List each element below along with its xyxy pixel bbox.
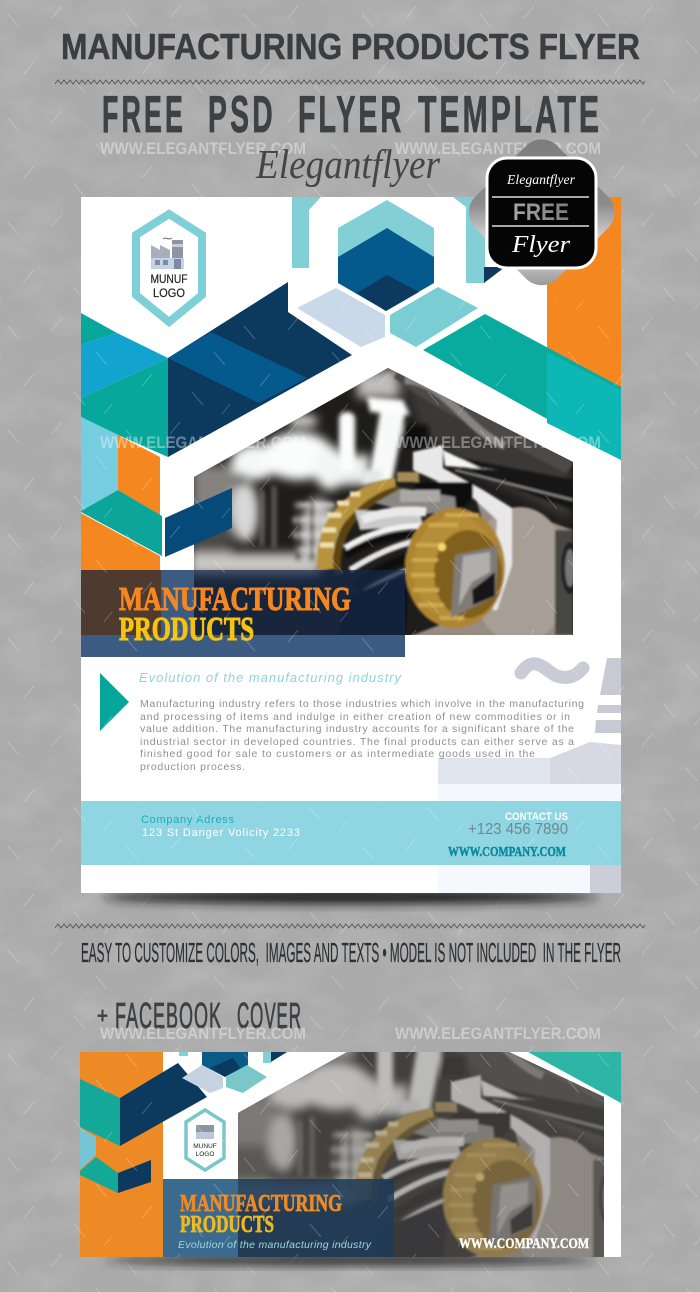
- cover headline: PRODUCTS: [180, 1212, 274, 1238]
- orange facet: [118, 435, 160, 515]
- navy hex block: [168, 282, 352, 457]
- logo hexagon: [136, 214, 202, 322]
- title band: [81, 570, 405, 657]
- teal right band: [423, 314, 621, 460]
- cover teal corner: [528, 1052, 621, 1103]
- cover navy facet lower: [118, 1160, 151, 1193]
- subtitle: FLYER: [298, 86, 404, 144]
- facebook cover heading: +: [97, 1003, 108, 1028]
- contact details: [448, 811, 568, 860]
- script logo: Elegantflyer: [255, 141, 441, 187]
- cover url: WWW.COMPANY.COM: [459, 1236, 589, 1252]
- cover headline: MANUFACTURING: [180, 1191, 342, 1217]
- contact details: WWW.COMPANY.COM: [448, 845, 566, 860]
- badge free: FREE: [513, 199, 569, 226]
- contact details: +123 456 7890: [468, 821, 568, 838]
- watermark row middle: [100, 433, 601, 452]
- free flyer badge: [460, 130, 624, 294]
- top hexagon: [338, 200, 434, 311]
- badge script top: Elegantflyer: [506, 173, 576, 188]
- flyer headline: MANUFACTURING: [119, 581, 351, 618]
- flyer headline: [119, 581, 351, 648]
- cover logo: MUNUF: [193, 1143, 217, 1150]
- navy chevron over photo: [165, 488, 232, 557]
- flyer shadow: [102, 890, 598, 904]
- flyer panel: [81, 197, 621, 893]
- hatch marks over flyer: [81, 300, 621, 893]
- logo text: LOGO: [153, 286, 185, 300]
- body copy: [140, 698, 584, 773]
- body copy: finished good for sale to customers or as intermediate goods used in the: [140, 748, 535, 760]
- logo text: MUNUF: [150, 272, 188, 286]
- cover logo: LOGO: [196, 1151, 214, 1158]
- cover teal facet lower: [80, 1157, 118, 1193]
- cover teal facet upper: [80, 1079, 120, 1146]
- watermark row bottom: WWW.ELEGANTFLYER.COM: [100, 1024, 306, 1043]
- watermark row top: WWW.ELEGANTFLYER.COM: [395, 139, 601, 158]
- cover top hex: [202, 1052, 248, 1077]
- address: Company Adress: [141, 814, 234, 826]
- subtitle: FREE: [102, 86, 186, 144]
- cover tagline: Evolution of the manufacturing industry: [178, 1239, 372, 1251]
- icon: factory: [151, 238, 184, 269]
- body copy: production process.: [140, 761, 245, 773]
- contact details: CONTACT US: [505, 811, 568, 823]
- watermark row middle: WWW.ELEGANTFLYER.COM: [100, 433, 306, 452]
- cover logo: [186, 1110, 224, 1170]
- cover photo: [238, 1052, 604, 1257]
- body copy: and processing of items and indulge in either creation of new commodities or in: [140, 711, 570, 723]
- zigzag divider top: [55, 80, 645, 84]
- watermark row top: [100, 139, 601, 158]
- watermark row top: WWW.ELEGANTFLYER.COM: [100, 139, 306, 158]
- contact band: [81, 801, 621, 865]
- cover teal tile: [226, 1065, 267, 1093]
- cover shadow: [105, 1255, 595, 1265]
- factory watermark: [438, 658, 621, 893]
- zigzag divider bottom: [55, 924, 645, 928]
- cover small bars: [179, 1052, 287, 1063]
- watermark row bottom: [100, 1024, 601, 1043]
- subtitle: PSD: [208, 86, 276, 144]
- section triangle: [100, 673, 129, 731]
- light blue facet: [81, 417, 118, 511]
- cover title band: [163, 1179, 394, 1257]
- watermark row bottom: WWW.ELEGANTFLYER.COM: [395, 1024, 601, 1043]
- text: COVER: [237, 995, 302, 1036]
- navy corner piece under badge: [484, 267, 505, 283]
- subtitle: [102, 86, 602, 144]
- title: MANUFACTURING PRODUCTS FLYER: [61, 26, 640, 67]
- cover navy block: [120, 1063, 207, 1146]
- facebook cover heading: FACEBOOK: [115, 995, 222, 1036]
- logo text: [150, 272, 188, 300]
- top frame: light teal bars: [292, 197, 485, 283]
- body copy: industrial sector in developed countries. The final products can either serve as a: [140, 736, 574, 748]
- watermark row middle: WWW.ELEGANTFLYER.COM: [395, 433, 601, 452]
- cover orange column: [80, 1052, 163, 1257]
- cover headline: [180, 1191, 342, 1238]
- body copy: value addition. The manufacturing industry accounts for a significant share of the: [140, 723, 574, 735]
- address: 123 St Danger Volicity 2233: [142, 827, 300, 839]
- flyer headline: PRODUCTS: [119, 611, 254, 648]
- light teal hex tile: [390, 287, 478, 347]
- hatch marks over cover: [80, 1052, 621, 1257]
- body copy: Manufacturing industry refers to those industries which involve in the manufacturing: [140, 698, 584, 710]
- address: [141, 814, 300, 839]
- left teal and blue block: [81, 313, 168, 457]
- teal facet: [81, 490, 162, 556]
- cover light blue facet: [80, 1128, 96, 1170]
- photo: gears: [194, 368, 573, 635]
- orange bottom left: [81, 513, 160, 570]
- pale blue hex tile: [297, 288, 385, 347]
- orange right block: [547, 197, 621, 390]
- section heading: Evolution of the manufacturing industry: [139, 670, 402, 685]
- badge script bottom: Flyer: [511, 232, 571, 258]
- cover pale tile: [182, 1065, 223, 1093]
- facebook cover panel: [80, 1052, 621, 1257]
